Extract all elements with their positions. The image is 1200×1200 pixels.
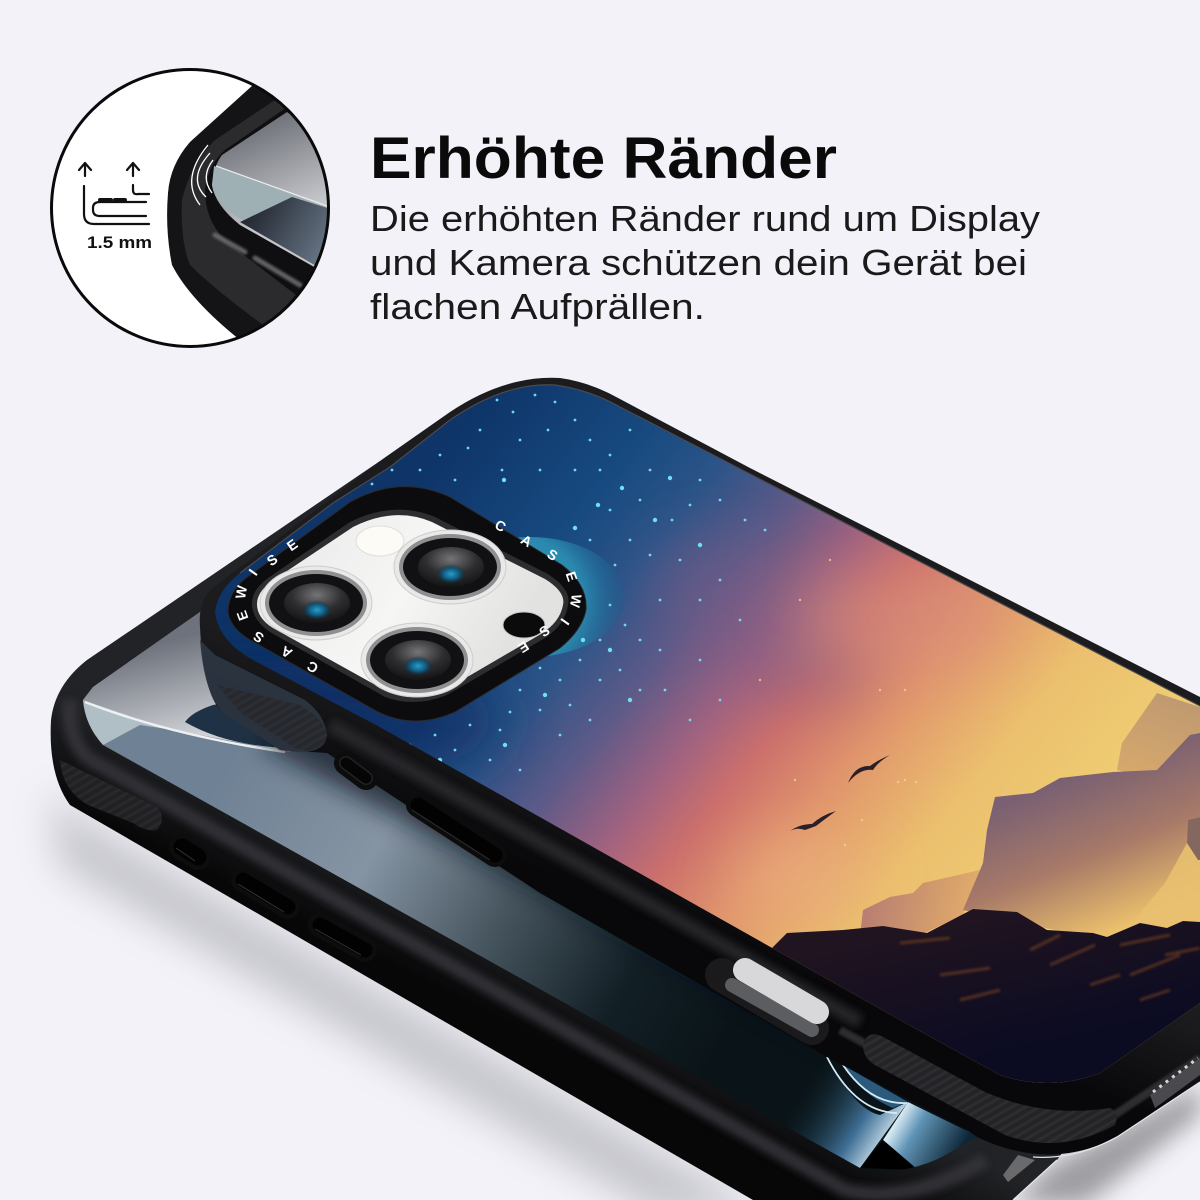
upper phone case	[200, 378, 1200, 1154]
lens: bottom	[361, 623, 473, 697]
ring lettering CASEWISE: E	[233, 609, 251, 623]
microphone hole	[503, 612, 545, 638]
dark foreground mountains	[772, 909, 1200, 1083]
lower phone port	[1003, 1155, 1035, 1182]
ring lettering CASEWISE: C	[304, 658, 321, 677]
lower phone case frame	[51, 461, 1100, 1200]
right inner cliff	[1145, 817, 1200, 908]
upper phone bezel shine	[840, 1030, 1200, 1129]
ring lettering CASEWISE: W	[232, 583, 250, 600]
1.5 mm label: 1.5 mm	[87, 234, 152, 252]
back cliff	[1117, 693, 1200, 772]
art edge highlight	[240, 385, 1200, 706]
flash	[356, 526, 404, 556]
moon	[518, 537, 624, 656]
ring lettering CASEWISE: E	[563, 570, 581, 583]
ring lettering CASEWISE: C	[492, 516, 509, 535]
ring lettering CASEWISE: W	[567, 593, 585, 610]
lower phone side button: action	[176, 847, 198, 861]
inset circle: raised edge detail	[52, 60, 345, 346]
low left cliff	[860, 870, 980, 935]
lower phone frame highlight	[70, 700, 985, 1194]
wallpaper beams	[793, 1057, 978, 1170]
long side button	[412, 805, 495, 860]
pale wallpaper wedge	[83, 700, 164, 745]
upper corner pad texture	[217, 685, 327, 750]
1.5 mm icon	[79, 163, 149, 224]
birds	[790, 755, 890, 831]
ring lettering CASEWISE: S	[250, 628, 267, 647]
ring lettering CASEWISE: A	[518, 531, 535, 550]
main cliff	[963, 733, 1200, 940]
ring lettering CASEWISE: A	[278, 643, 295, 662]
ring lettering CASEWISE: S	[264, 551, 281, 569]
title: Erhöhte Ränder	[370, 126, 837, 191]
camera module	[228, 487, 586, 721]
camera inner lip	[252, 510, 569, 702]
bottom corner pad	[863, 1034, 1117, 1143]
body text: flachen Aufprällen.	[370, 286, 705, 327]
cloud glow	[643, 530, 878, 720]
body text	[370, 198, 1040, 327]
body text: Die erhöhten Ränder rund um Display	[370, 198, 1040, 239]
lens: left	[260, 566, 372, 640]
ring switch	[346, 763, 366, 778]
inset phone corner close-up	[167, 86, 327, 337]
lens: top	[394, 530, 506, 604]
lower phone edge line	[1013, 1160, 1057, 1200]
body text: und Kamera schützen dein Gerät bei	[370, 242, 1027, 283]
inset disc	[52, 70, 328, 346]
ring lettering CASEWISE: I	[245, 566, 261, 578]
lower phone	[51, 460, 1100, 1200]
camera ring	[228, 487, 586, 721]
impact arcs	[192, 145, 213, 205]
lower phone side button: volume down	[315, 925, 365, 955]
upper phone side sheen	[330, 725, 860, 1022]
light reflex strip	[215, 235, 300, 285]
inset outline	[52, 70, 328, 346]
speaker grille	[1150, 1058, 1200, 1108]
ring lettering CASEWISE: E	[515, 638, 532, 657]
ring lettering CASEWISE: I	[557, 616, 573, 628]
ring lettering CASEWISE: E	[284, 536, 301, 554]
upper corner pad (translucent)	[200, 640, 327, 752]
lower phone screen	[83, 612, 978, 1170]
stars	[360, 395, 765, 790]
camera plate	[257, 515, 563, 697]
artwork: starry sunset	[215, 385, 1200, 1083]
silver power button	[722, 970, 817, 1030]
screen shade	[250, 740, 615, 940]
lower phone corner pad	[60, 760, 162, 830]
drop shadow under phones	[50, 790, 1200, 1200]
mountain rust highlights	[900, 935, 1200, 1000]
ring lettering CASEWISE: S	[536, 622, 553, 641]
lower phone side button: volume up	[238, 880, 288, 912]
ring lettering CASEWISE	[232, 516, 585, 677]
ring lettering CASEWISE: S	[544, 545, 561, 564]
dark notch	[185, 704, 276, 748]
upper phone bottom edge line	[1033, 1082, 1200, 1157]
